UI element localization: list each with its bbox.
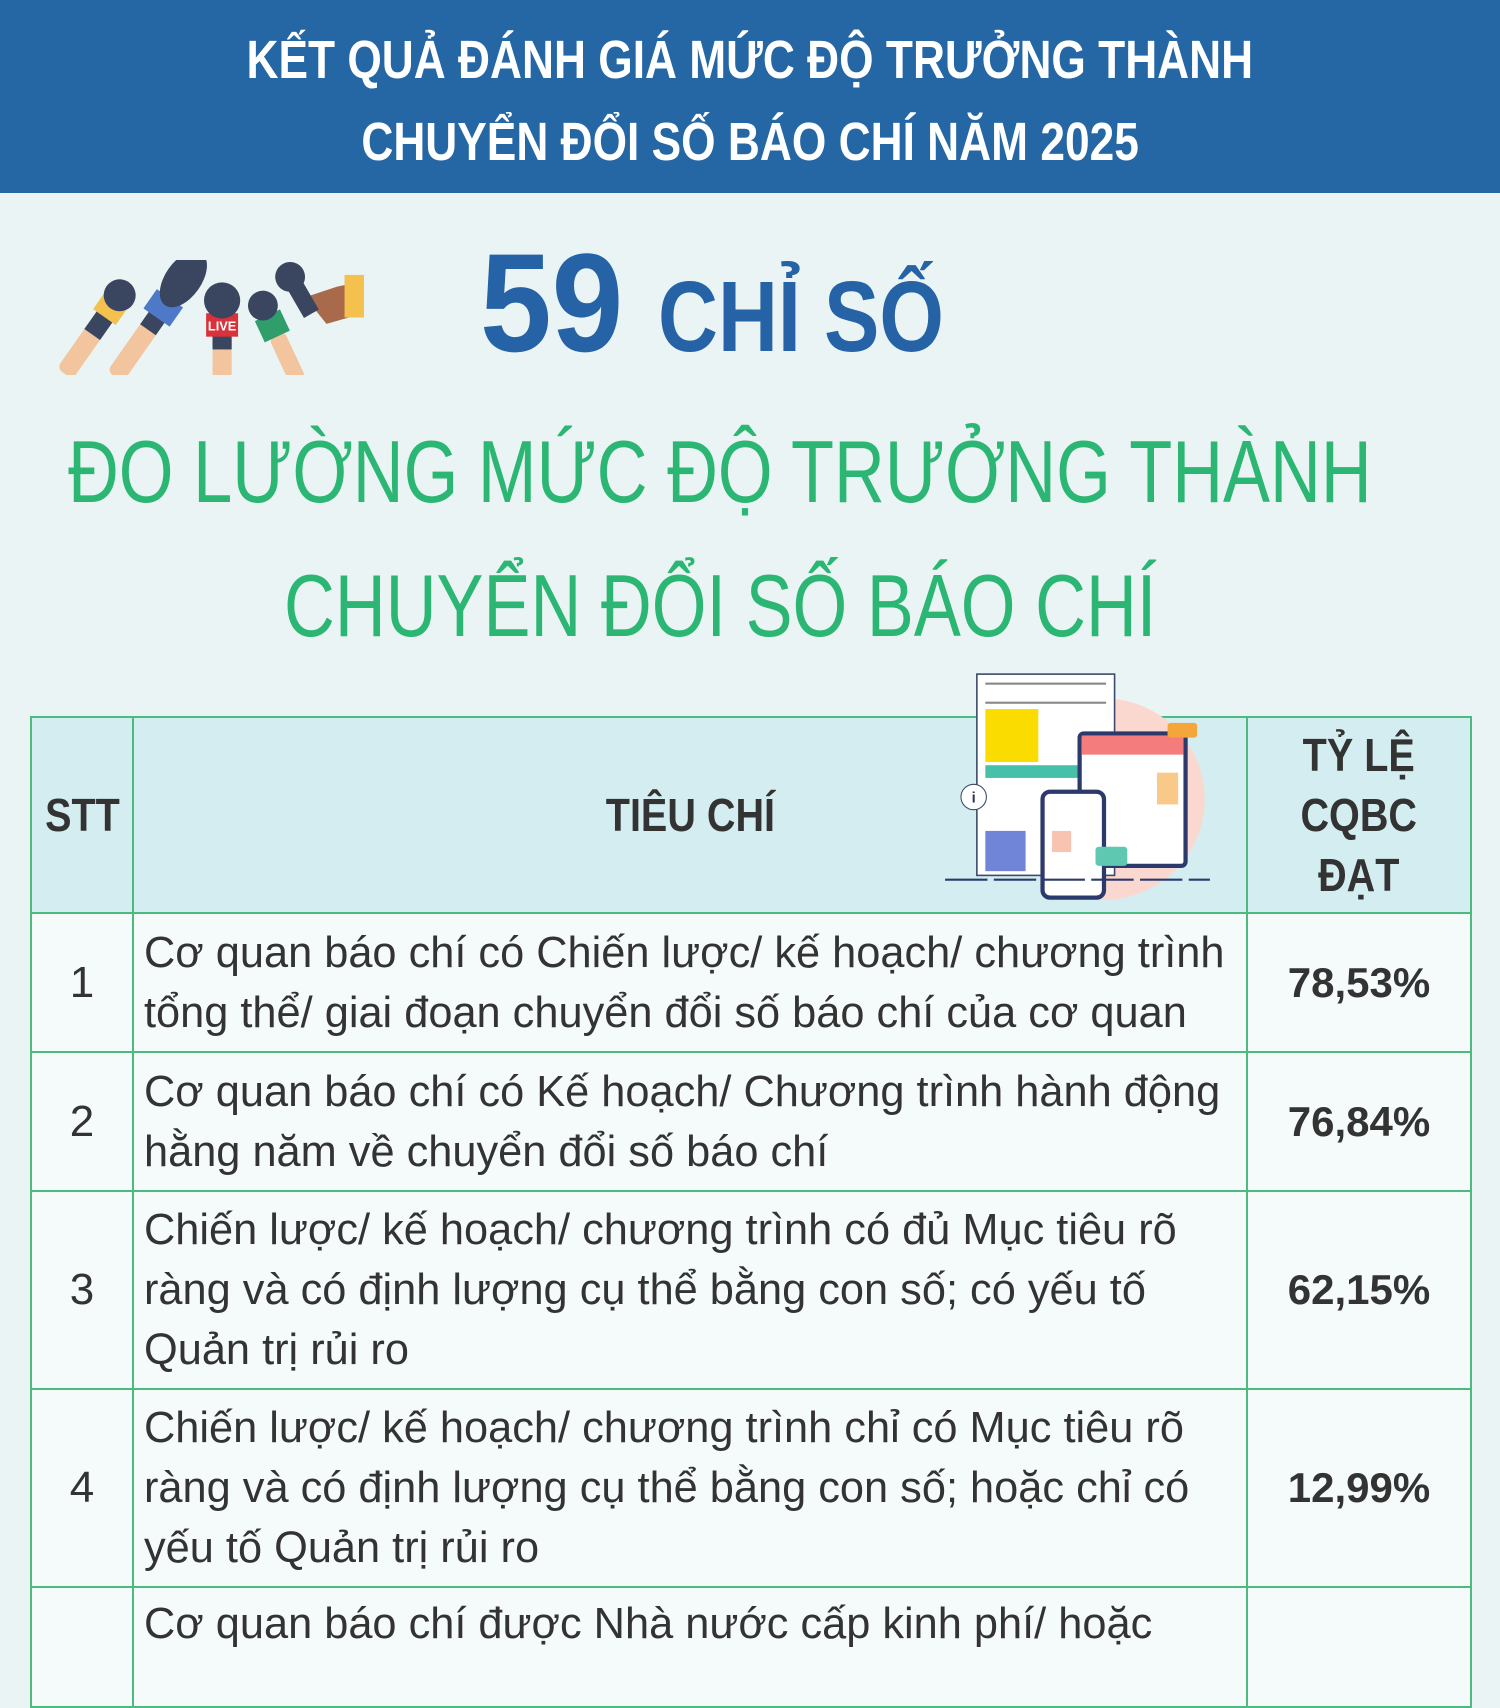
table: ràng và có định lượng cụ thể bằng con số; hoặc chỉ có (144, 1463, 1189, 1512)
icon: microphones (59, 260, 364, 375)
table: ĐẠT (1318, 849, 1400, 901)
table: TIÊU CHÍ (605, 789, 775, 841)
table: 12,99% (1288, 1464, 1430, 1511)
big number (480, 224, 944, 381)
table: STT (45, 789, 119, 841)
table: 62,15% (1288, 1266, 1430, 1313)
table: 1 (70, 958, 94, 1006)
table: 4 (70, 1463, 94, 1512)
icon: digital news devices: i (972, 790, 976, 806)
table: Quản trị rủi ro (144, 1325, 409, 1374)
table: Chiến lược/ kế hoạch/ chương trình có đủ Mục tiêu rõ (144, 1205, 1177, 1254)
table: Cơ quan báo chí có Kế hoạch/ Chương trình hành động (144, 1066, 1220, 1116)
subtitle green: ĐO LƯỜNG MỨC ĐỘ TRƯỞNG THÀNH (68, 422, 1372, 521)
table: TỶ LỆ (1303, 729, 1415, 781)
table: Cơ quan báo chí có Chiến lược/ kế hoạch/ chương trình (144, 928, 1224, 976)
big number: 59 (480, 224, 623, 381)
table: hằng năm về chuyển đổi số báo chí (144, 1126, 828, 1176)
table: 2 (70, 1096, 94, 1146)
title: CHUYỂN ĐỔI SỐ BÁO CHÍ NĂM 2025 (361, 112, 1139, 172)
table: Cơ quan báo chí được Nhà nước cấp kinh phí/ hoặc (144, 1599, 1152, 1648)
table: 78,53% (1288, 958, 1430, 1006)
table: Chiến lược/ kế hoạch/ chương trình chỉ có Mục tiêu rõ (144, 1403, 1184, 1452)
table (30, 716, 1472, 1708)
subtitle green (68, 422, 1372, 655)
subtitle green: CHUYỂN ĐỔI SỐ BÁO CHÍ (284, 556, 1156, 655)
table: 76,84% (1288, 1098, 1430, 1144)
table: tổng thể/ giai đoạn chuyển đổi số báo chí của cơ quan (144, 988, 1187, 1036)
header banner (0, 0, 1500, 193)
big number: CHỈ SỐ (658, 261, 944, 373)
table: CQBC (1301, 789, 1417, 841)
title: KẾT QUẢ ĐÁNH GIÁ MỨC ĐỘ TRƯỞNG THÀNH (247, 30, 1253, 90)
table: yếu tố Quản trị rủi ro (144, 1523, 539, 1572)
icon: digital news devices (945, 673, 1210, 900)
table: 3 (70, 1265, 94, 1314)
table: ràng và có định lượng cụ thể bằng con số; có yếu tố (144, 1265, 1146, 1314)
icon: microphones: LIVE (208, 318, 237, 333)
title (247, 30, 1253, 172)
